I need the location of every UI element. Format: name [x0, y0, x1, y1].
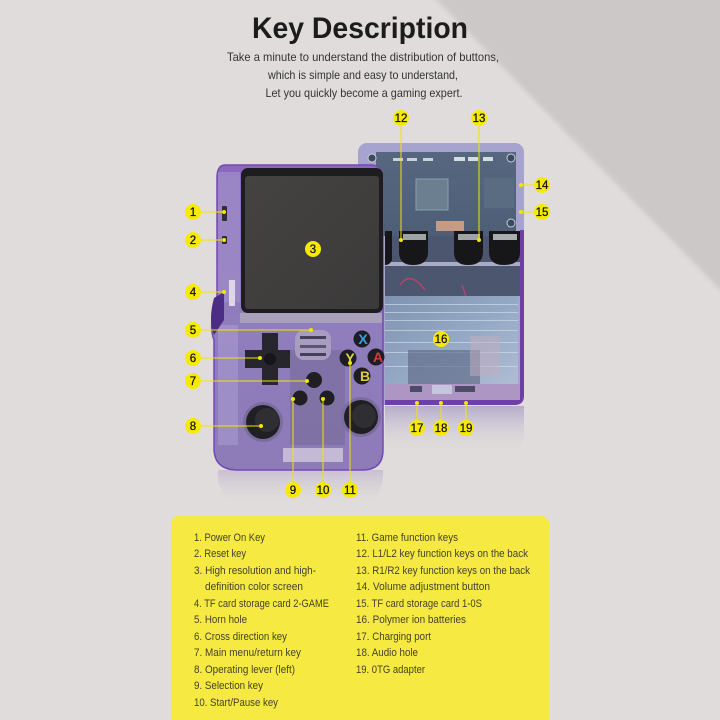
legend column 1: 9. Selection key	[194, 680, 263, 692]
title: Key Description	[252, 12, 468, 45]
subtitle text block: Let you quickly become a gaming expert.	[266, 86, 462, 100]
menu and start select keys	[292, 372, 334, 406]
marker 17: 17	[411, 423, 423, 435]
marker 9	[285, 397, 301, 498]
marker 18: 18	[435, 423, 447, 435]
legend column 2: 15. TF card storage card 1-0S	[356, 598, 482, 610]
subtitle text block: which is simple and easy to understand,	[267, 68, 458, 82]
marker 13: 13	[473, 113, 485, 125]
function keys: X	[358, 331, 368, 347]
marker 5: 5	[190, 325, 196, 337]
bottom edge	[385, 384, 520, 400]
legend column 2: 16. Polymer ion batteries	[356, 614, 466, 626]
marker 11	[342, 361, 358, 498]
subtitle text block: Take a minute to understand the distribution of buttons,	[227, 50, 499, 64]
front shell	[212, 165, 383, 470]
marker 14	[519, 177, 550, 193]
marker 12	[393, 110, 409, 242]
bottom port	[283, 448, 343, 462]
marker 10	[315, 397, 331, 498]
marker 2: 2	[190, 235, 196, 247]
back shell	[358, 143, 524, 405]
marker 2	[185, 232, 226, 248]
marker 8: 8	[190, 421, 196, 433]
marker 15: 15	[536, 207, 548, 219]
marker 3	[305, 241, 321, 257]
legend column 2: 12. L1/L2 key function keys on the back	[356, 548, 528, 560]
legend column 2: 14. Volume adjustment button	[356, 581, 490, 593]
legend column 2: 18. Audio hole	[356, 647, 418, 659]
marker 19: 19	[460, 423, 472, 435]
marker 7: 7	[190, 376, 196, 388]
legend column 1: 2. Reset key	[194, 548, 246, 560]
marker 4	[185, 284, 226, 300]
marker 16	[433, 331, 449, 347]
legend column 2: 17. Charging port	[356, 631, 431, 643]
cross key	[245, 333, 290, 385]
legend column 1: 6. Cross direction key	[194, 631, 287, 643]
marker 15	[519, 204, 550, 220]
legend background	[171, 516, 549, 720]
marker 13	[471, 110, 487, 242]
marker 1: 1	[190, 207, 196, 219]
legend column 2: 19. 0TG adapter	[356, 664, 425, 676]
marker 3: 3	[310, 244, 316, 256]
screen	[241, 168, 383, 313]
legend column 2	[356, 532, 530, 676]
side ports	[211, 206, 235, 335]
back reflection	[385, 406, 524, 452]
marker 5	[185, 322, 313, 338]
left joystick	[243, 402, 283, 442]
function keys: A	[373, 349, 383, 365]
legend column 1: 10. Start/Pause key	[194, 697, 278, 709]
legend column 1: 1. Power On Key	[194, 532, 265, 544]
legend column 1	[194, 532, 329, 709]
marker 17	[409, 401, 425, 436]
marker 19	[458, 401, 474, 436]
panel: key legend	[171, 516, 549, 720]
marker 7	[185, 373, 309, 389]
trigger keys	[385, 231, 520, 265]
subtitle text block	[227, 50, 499, 100]
marker 11: 11	[344, 485, 356, 497]
function keys: Y	[345, 350, 355, 366]
legend column 2: 11. Game function keys	[356, 532, 458, 544]
marker 1	[185, 204, 226, 220]
right joystick	[341, 397, 381, 437]
marker 9: 9	[290, 485, 296, 497]
legend column 1: 4. TF card storage card 2-GAME	[194, 598, 329, 610]
device front view	[211, 165, 384, 502]
function keys: B	[360, 368, 370, 384]
speaker	[295, 330, 331, 360]
marker 6: 6	[190, 353, 196, 365]
legend column 1: 3. High resolution and high-	[194, 565, 316, 577]
marker 4: 4	[190, 287, 197, 299]
marker 8	[185, 418, 263, 434]
device back view	[358, 143, 524, 452]
marker 12: 12	[395, 113, 407, 125]
circuit board	[368, 152, 516, 236]
callout markers	[185, 110, 550, 498]
legend column 1: 8. Operating lever (left)	[194, 664, 295, 676]
shoulder band	[385, 236, 520, 296]
marker 10: 10	[317, 485, 329, 497]
function keys	[340, 330, 384, 384]
battery	[385, 296, 518, 384]
front reflection	[218, 470, 383, 502]
legend column 1: definition color screen	[205, 581, 303, 593]
legend column 2: 13. R1/R2 key function keys on the back	[356, 565, 530, 577]
marker 14: 14	[536, 180, 549, 192]
marker 6	[185, 350, 262, 366]
lower panel shade	[290, 350, 345, 445]
marker 18	[433, 401, 449, 436]
legend column 1: 7. Main menu/return key	[194, 647, 301, 659]
legend column 1: 5. Horn hole	[194, 614, 247, 626]
marker 16: 16	[435, 334, 447, 346]
